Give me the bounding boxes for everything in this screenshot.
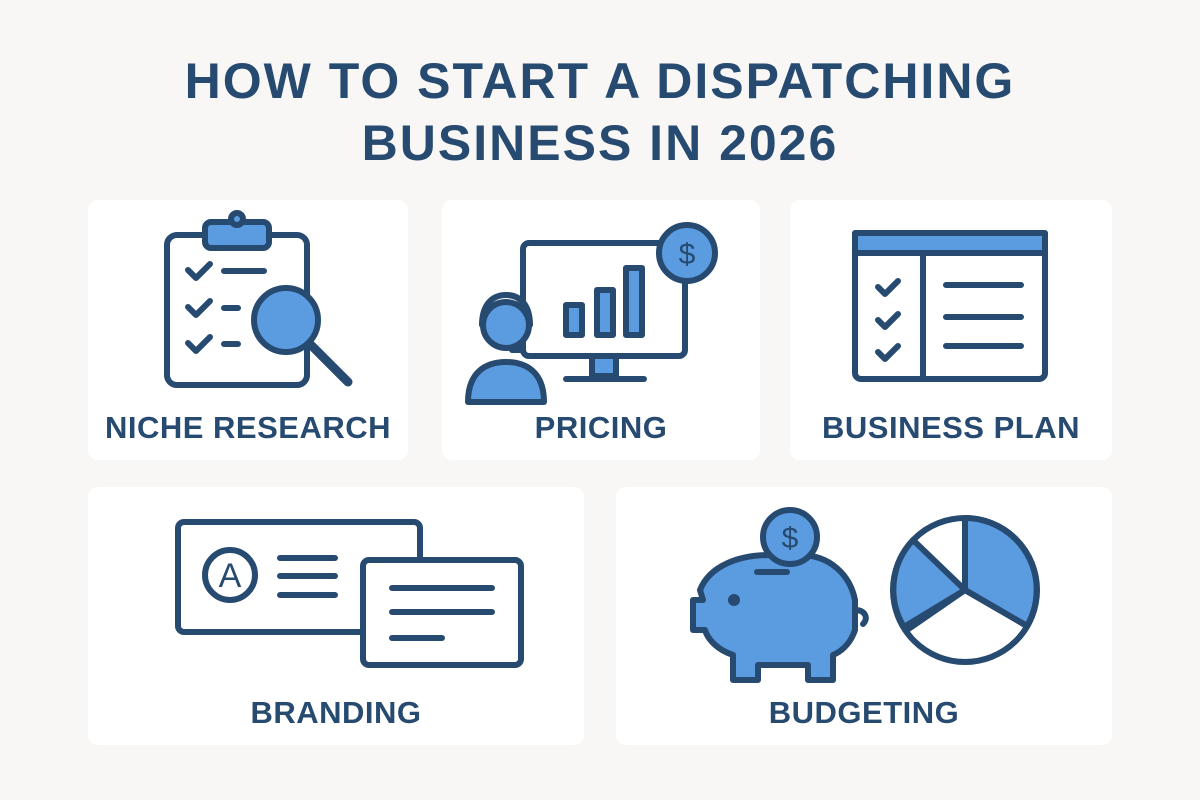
icon: piggy bank and pie chart: $	[782, 522, 799, 555]
panel: business plan	[790, 200, 1112, 460]
title	[185, 53, 1015, 171]
panel: branding	[88, 487, 584, 745]
icon: business cards	[175, 519, 524, 668]
icon: clipboard with magnifier	[164, 210, 352, 388]
panel: budgeting	[616, 487, 1112, 745]
panel: business plan: BUSINESS PLAN	[822, 410, 1080, 445]
panel: branding: BRANDING	[250, 695, 422, 730]
panel: niche research: NICHE RESEARCH	[105, 410, 391, 445]
title: BUSINESS IN 2026	[362, 115, 838, 171]
panel: pricing: PRICING	[535, 410, 667, 445]
title: HOW TO START A DISPATCHING	[185, 53, 1015, 109]
icon: checklist document	[852, 230, 1048, 382]
panel: budgeting: BUDGETING	[769, 695, 959, 730]
icon: monitor chart with agent: $	[679, 238, 696, 271]
panel: pricing	[442, 200, 760, 460]
icon: piggy bank and pie chart	[690, 507, 1040, 683]
icon: monitor chart with agent	[465, 222, 718, 405]
panel: niche research	[88, 200, 408, 460]
icon: business cards: A	[219, 557, 242, 595]
